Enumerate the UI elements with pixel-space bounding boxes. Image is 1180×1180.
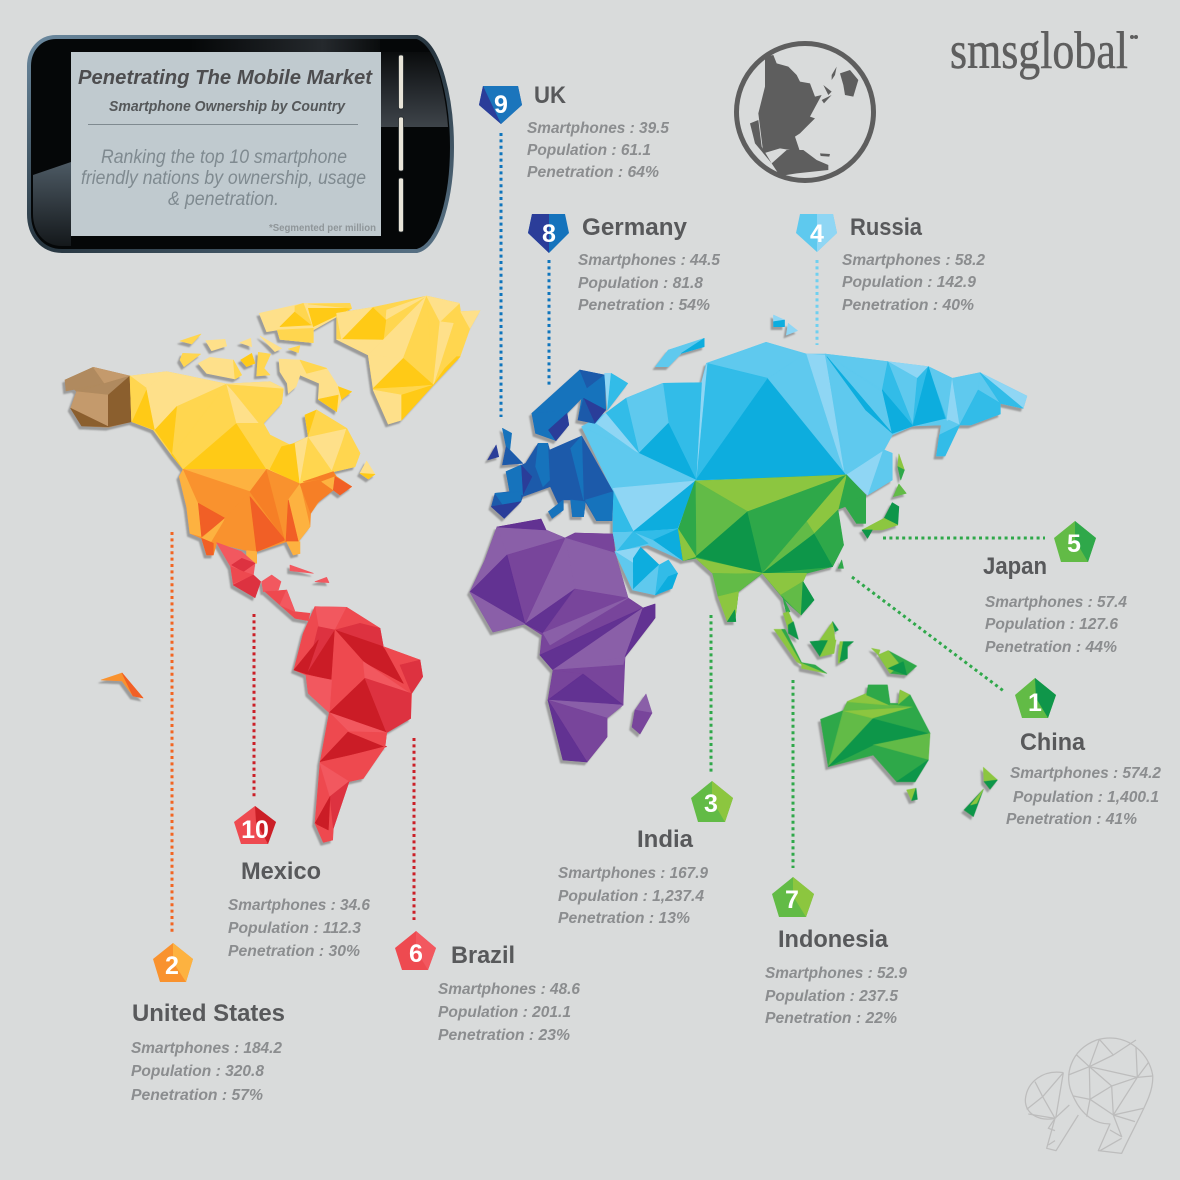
badge 6: 6 [409, 940, 423, 968]
connector: Mexico [252, 614, 256, 798]
badge 2 [153, 943, 193, 982]
connector: Indonesia [792, 680, 794, 868]
stats: Smartphones : 574.2 [1010, 765, 1161, 782]
badge 2: 2 [165, 952, 179, 980]
stats [842, 252, 985, 314]
stats: Population : 81.8 [578, 275, 703, 292]
panel: Brazil [395, 931, 580, 1044]
stats: Penetration : 64% [527, 164, 659, 181]
connector: United States [170, 532, 174, 935]
island: Hawaii [101, 673, 143, 698]
stats: Smartphones : 44.5 [578, 252, 721, 269]
footnote: *Segmented per million [269, 222, 376, 234]
continent: Europe and Scandinavia [488, 370, 628, 521]
country name: Japan [983, 553, 1047, 580]
badge 8 [528, 214, 569, 253]
description: & penetration. [168, 189, 279, 210]
phone screen [71, 52, 381, 236]
continent: Central America, South America and Hawaii [217, 543, 423, 842]
country name: China [1020, 729, 1086, 756]
country name: Indonesia [778, 926, 889, 953]
connector: Brazil [412, 738, 416, 920]
description: friendly nations by ownership, usage [81, 168, 366, 189]
panel: Japan [983, 521, 1127, 656]
stats: Penetration : 41% [1006, 811, 1137, 828]
stats: Penetration : 57% [131, 1087, 263, 1104]
badge 3: 3 [704, 790, 718, 818]
panel: Mexico [228, 806, 370, 960]
stats: Population : 1,400.1 [1013, 789, 1159, 806]
stats: Smartphones : 52.9 [765, 965, 907, 982]
badge 9 [479, 86, 522, 124]
stats [558, 865, 708, 927]
badge 4: 4 [810, 220, 824, 248]
panel: UK [479, 82, 670, 181]
stats: Population : 201.1 [438, 1004, 571, 1021]
stats [985, 594, 1127, 656]
panel: Russia [796, 214, 985, 314]
stats: Penetration : 44% [985, 639, 1117, 656]
stats: Population : 237.5 [765, 988, 899, 1005]
stats: Population : 127.6 [985, 616, 1118, 633]
country name: Brazil [451, 942, 515, 969]
stats: Smartphones : 57.4 [985, 594, 1127, 611]
country name: Germany [582, 214, 688, 241]
connector: India [710, 615, 712, 775]
continent: United States [179, 469, 352, 563]
connector: UK [500, 133, 502, 417]
badge 7 [772, 877, 814, 917]
phone side buttons [398, 55, 404, 232]
panel: Germany [528, 214, 721, 314]
world map [65, 296, 1027, 842]
stats: Population : 112.3 [228, 920, 361, 937]
stats: Penetration : 23% [438, 1027, 570, 1044]
description [81, 147, 366, 210]
phone body [29, 37, 452, 251]
badge 10: 10 [241, 816, 269, 844]
country name: Russia [850, 214, 923, 241]
stats: Penetration : 30% [228, 943, 360, 960]
stats [1006, 765, 1161, 828]
stats: Population : 1,237.4 [558, 888, 704, 905]
country name: United States [132, 1000, 285, 1027]
continent: Russia and Middle East [582, 315, 1027, 595]
icon: faceted quotation marks [1025, 1038, 1153, 1153]
badge 5 [1054, 521, 1096, 562]
connector: Russia [816, 260, 818, 345]
stats [527, 120, 670, 181]
connector: China [852, 577, 1005, 692]
country name: India [637, 826, 694, 853]
country name: Mexico [241, 858, 321, 885]
stats: Population : 320.8 [131, 1063, 264, 1080]
stats: Smartphones : 48.6 [438, 981, 580, 998]
stats: Smartphones : 34.6 [228, 897, 370, 914]
description: Ranking the top 10 smartphone [101, 147, 347, 168]
connector: Germany [548, 260, 550, 385]
badge 5: 5 [1067, 530, 1081, 558]
badge 7: 7 [785, 886, 799, 914]
badge 4 [796, 214, 837, 252]
panel: China [1006, 678, 1161, 828]
stats: Population : 61.1 [527, 142, 651, 159]
continent: Canada and Greenland [130, 296, 480, 484]
panel: India [558, 781, 733, 927]
stats: Penetration : 40% [842, 297, 974, 314]
subtitle: Smartphone Ownership by Country [109, 98, 346, 115]
stats [438, 981, 580, 1044]
stats: Penetration : 22% [765, 1010, 897, 1027]
stats [578, 252, 721, 314]
stats: Smartphones : 184.2 [131, 1040, 282, 1057]
connector: Japan [883, 536, 1045, 540]
badge 9: 9 [494, 91, 508, 119]
badge 6 [395, 931, 436, 970]
stats: Smartphones : 167.9 [558, 865, 708, 882]
stats [228, 897, 370, 960]
title: Penetrating The Mobile Market [78, 67, 373, 89]
continent: Alaska [65, 367, 132, 427]
stats: Penetration : 13% [558, 910, 690, 927]
stats: Penetration : 54% [578, 297, 710, 314]
continent: Indonesia and Oceania [774, 612, 997, 817]
stats: Population : 142.9 [842, 274, 976, 291]
badge 10 [234, 806, 276, 844]
continent: China and Asia [678, 454, 906, 622]
badge 1: 1 [1028, 689, 1042, 717]
stats [131, 1040, 282, 1104]
stats: Smartphones : 39.5 [527, 120, 670, 137]
phone glass reflections [33, 39, 448, 246]
stats: Smartphones : 58.2 [842, 252, 985, 269]
badge 3 [691, 781, 733, 822]
panel: Indonesia [765, 877, 907, 1027]
badge 1 [1015, 678, 1056, 718]
phone header panel [29, 37, 452, 251]
badge 8: 8 [542, 220, 556, 248]
panel: United States [131, 943, 285, 1104]
stats [765, 965, 907, 1027]
icon: globe [736, 44, 874, 180]
country name: UK [534, 82, 567, 109]
continent: Africa [470, 519, 655, 762]
logo: smsglobal: smsglobal [950, 22, 1128, 80]
